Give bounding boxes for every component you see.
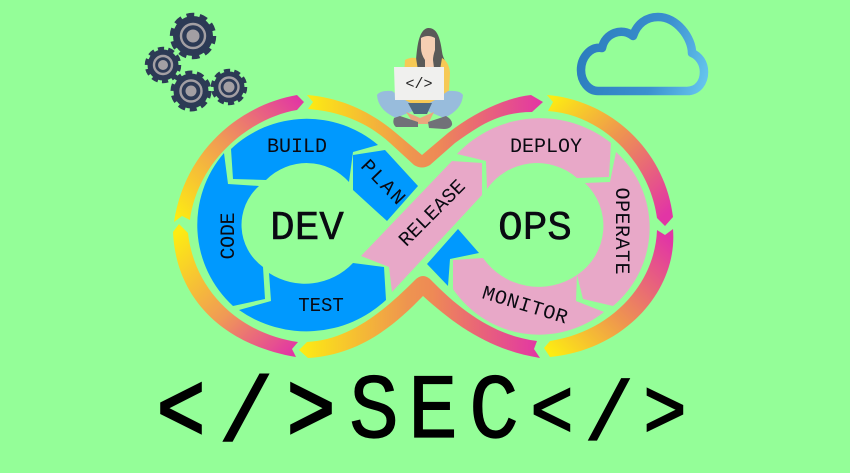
title: code brackets and SEC: / [585, 370, 633, 464]
icon: gears [147, 16, 245, 109]
shirt [402, 58, 450, 104]
title: code brackets and SEC: S [349, 361, 399, 465]
label: code: CODE [218, 212, 241, 260]
legs [377, 91, 463, 118]
segment: build [231, 119, 378, 182]
title: code brackets and SEC: > [287, 360, 335, 469]
outer arrow: top right [547, 95, 673, 226]
outer arrow: bottom left [173, 224, 298, 357]
hair [415, 28, 449, 76]
segment: deploy [457, 118, 611, 189]
face and neck [421, 36, 435, 68]
title: code brackets and SEC: / [219, 366, 273, 468]
title: code brackets and SEC [157, 360, 687, 469]
label: monitor: MONITOR [479, 283, 570, 330]
outer arrow: top loop crossing [307, 95, 543, 168]
title: code brackets and SEC: C [469, 361, 519, 465]
label: test: TEST [298, 295, 344, 317]
label: build: BUILD [267, 136, 327, 159]
label: deploy: DEPLOY [510, 136, 582, 159]
heading: ops: OPS [498, 206, 572, 252]
segment: code [197, 153, 265, 306]
illustration: person with laptop [377, 28, 463, 129]
title: code brackets and SEC: < [530, 369, 574, 463]
laptop: </> [405, 76, 433, 93]
segment: test [239, 263, 386, 331]
icon: cloud [581, 17, 704, 91]
label: release: RELEASE [395, 176, 471, 252]
heading: dev: DEV [270, 206, 344, 252]
segment: plan arrow tail [427, 229, 479, 286]
label: operate: OPERATE [609, 188, 632, 274]
title: code brackets and SEC: < [157, 360, 205, 469]
segment: operate [577, 152, 650, 306]
outer arrow: bottom right [544, 229, 673, 357]
outer arrow: top left [174, 95, 304, 222]
outer arrow: bottom loop crossing [299, 276, 540, 358]
title: code brackets and SEC: > [643, 369, 687, 463]
segment: monitor [453, 258, 604, 335]
segment: plan [353, 150, 418, 221]
lap [408, 103, 432, 114]
label: plan: PLAN [355, 156, 409, 210]
hands [406, 112, 434, 124]
segment: release [361, 161, 482, 292]
shoes [393, 116, 452, 129]
title: code brackets and SEC: E [408, 361, 458, 465]
